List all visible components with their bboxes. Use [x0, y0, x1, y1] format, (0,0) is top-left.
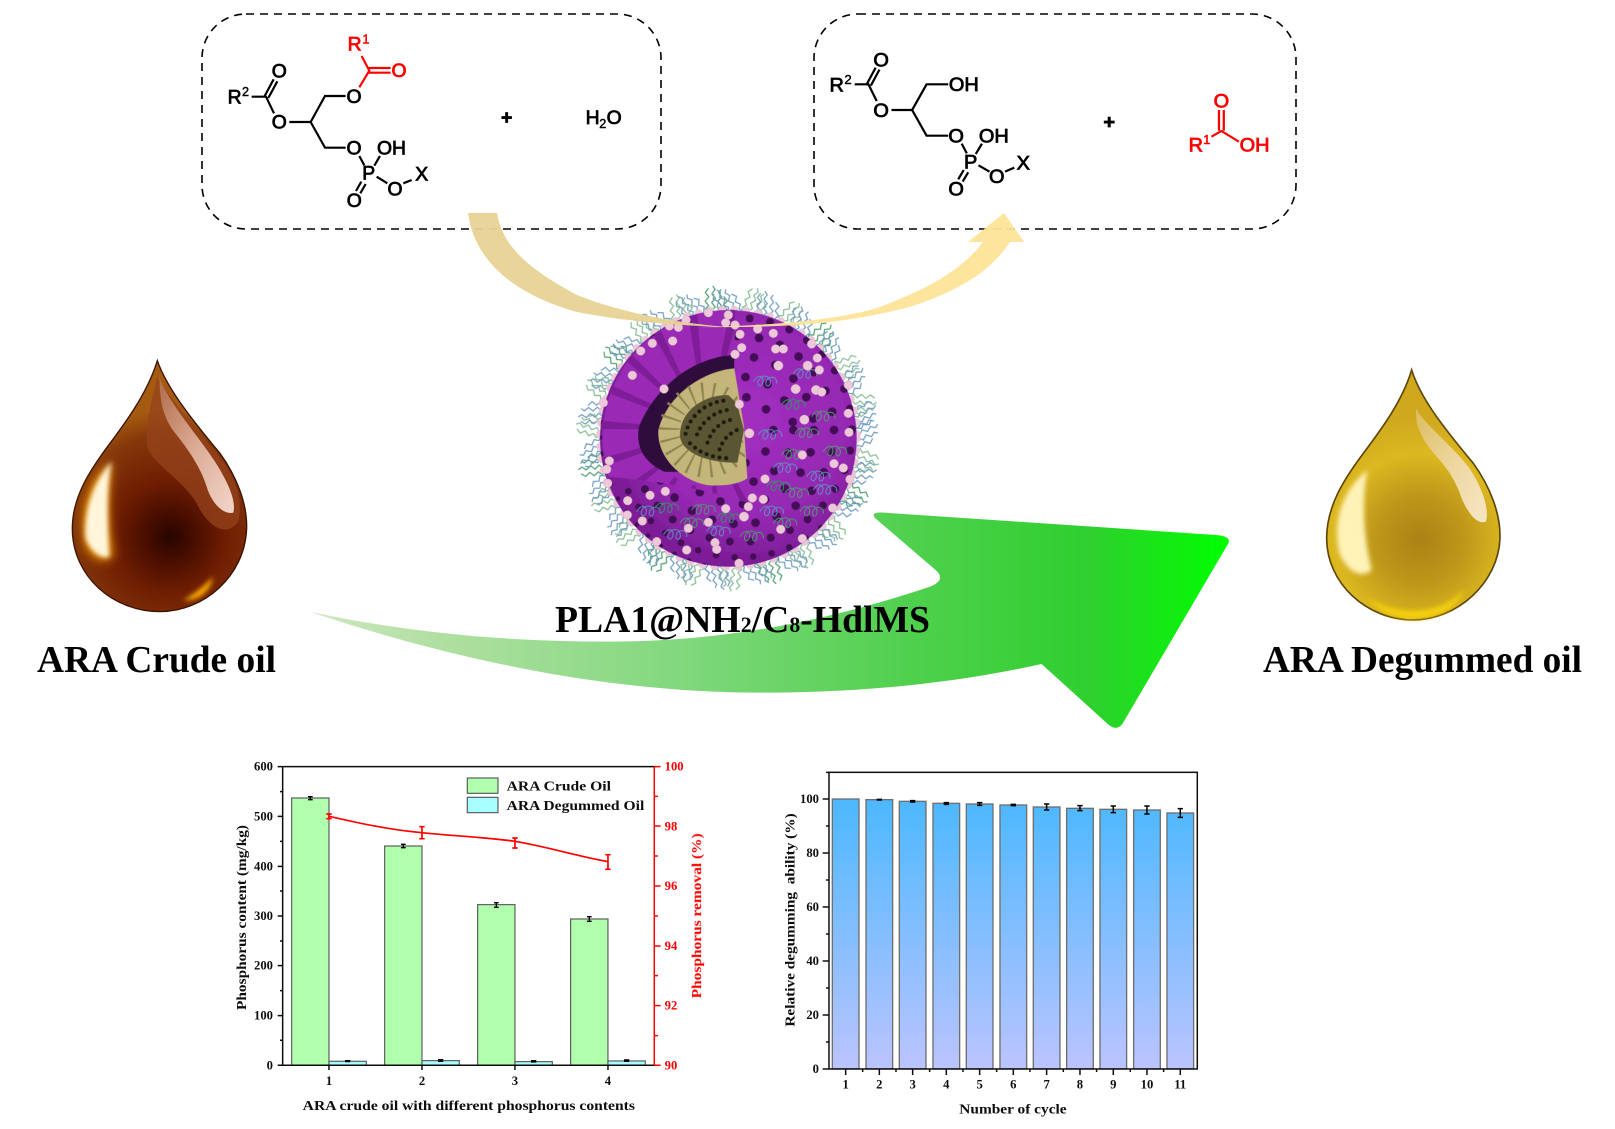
right axis labels: 96 [665, 879, 677, 893]
chemical structure: lysophospholipid and fatty acid: O [873, 100, 889, 122]
label: PLA1@NH2/C8-HdlMS: PLA1@NH2/C8-HdlMS [555, 599, 930, 641]
chemical structure: lysophospholipid and fatty acid: X [1017, 153, 1030, 174]
left axis labels: 100 [254, 1009, 273, 1023]
chemical structure: phospholipid with water: R [228, 87, 242, 108]
chemical structure: lysophospholipid and fatty acid: OH [979, 126, 1009, 147]
label: ARA Degummed oil: ARA Degummed oil [1263, 639, 1582, 681]
chemical structure: phospholipid with water: O [607, 108, 622, 129]
surface ligand curls [637, 368, 847, 541]
y axis labels [800, 792, 819, 1076]
chemical structure: phospholipid with water [228, 32, 622, 212]
chemical structure: phospholipid with water: OH [377, 138, 406, 159]
chemical structure: phospholipid with water: 1 [362, 32, 369, 46]
right axis labels [665, 760, 684, 1072]
icon: crude oil drop [72, 361, 247, 612]
x axis labels: 2 [876, 1078, 882, 1092]
right axis labels: 92 [665, 999, 677, 1013]
bar error bars [308, 797, 629, 1062]
y axis title: Relative degumming ability (%) [783, 813, 798, 1027]
phosphorus removal line [326, 814, 611, 869]
y axis labels: 100 [800, 792, 819, 806]
degummed oil bars [329, 1061, 645, 1065]
y axis labels: 40 [806, 954, 819, 968]
bar chart: phosphorus content and removal [235, 760, 705, 1114]
panel: products dashed box [814, 14, 1296, 229]
left and bottom axes [278, 767, 654, 1070]
icon: degummed oil drop [1327, 370, 1500, 620]
x axis labels: 4 [943, 1078, 950, 1092]
chemical structure: lysophospholipid and fatty acid: O [1214, 91, 1229, 113]
axes frame and ticks [823, 772, 1197, 1075]
chemical structure: phospholipid with water: O [391, 61, 407, 82]
icon: nanoparticle PLA1@NH2/C8-HdlMS [573, 283, 883, 593]
x axis labels: 3 [909, 1078, 916, 1092]
panel: substrates dashed box [202, 14, 661, 229]
y axis title right: Phosphorus removal (%) [690, 833, 705, 998]
x axis labels [842, 1078, 1186, 1092]
x axis labels: 4 [605, 1074, 612, 1088]
purple shell [600, 310, 857, 567]
x axis labels: 2 [419, 1074, 425, 1088]
x axis labels: 7 [1043, 1078, 1050, 1092]
y axis labels: 80 [806, 846, 819, 860]
chemical structure: lysophospholipid and fatty acid: O [989, 166, 1004, 188]
x axis labels: 5 [976, 1078, 983, 1092]
x axis labels [326, 1074, 612, 1088]
right axis [654, 767, 661, 1065]
right axis labels: 90 [665, 1058, 677, 1072]
x axis title: ARA crude oil with different phosphorus contents [303, 1099, 636, 1114]
cycle bars [832, 799, 1194, 1069]
chemical structure: phospholipid with water: H [586, 108, 600, 129]
right axis labels: 100 [665, 760, 684, 774]
chemical structure: lysophospholipid and fatty acid: OH [949, 74, 979, 96]
shell pores [600, 314, 856, 567]
left axis labels: 400 [254, 859, 273, 873]
y axis title left: Phosphorus content (mg/kg) [235, 825, 250, 1010]
arrow: yellow product arrow out of particle [700, 213, 1024, 327]
x axis labels: 10 [1141, 1078, 1153, 1092]
pale particle rim [600, 310, 857, 567]
x axis labels: 6 [1010, 1078, 1016, 1092]
chemical structure: phospholipid with water: O [347, 191, 362, 212]
chemical structure: lysophospholipid and fatty acid: R [1189, 135, 1203, 157]
y axis labels: 0 [813, 1062, 819, 1076]
chemical structure: lysophospholipid and fatty acid: O [873, 50, 889, 71]
ligand chains around the particle [573, 283, 883, 593]
legend: ARA Crude Oil [507, 780, 611, 795]
left axis labels: 200 [254, 959, 273, 973]
chemical structure: phospholipid with water: R [348, 35, 362, 56]
chemical structure: lysophospholipid and fatty acid [830, 50, 1270, 200]
chemical structure: phospholipid with water: + [501, 108, 512, 129]
y axis labels: 60 [806, 900, 819, 914]
crude oil bars [292, 798, 608, 1065]
right axis labels: 94 [665, 939, 678, 953]
chemical structure: lysophospholipid and fatty acid: + [1103, 112, 1115, 133]
chemical structure: lysophospholipid and fatty acid: O [948, 179, 964, 200]
x axis labels: 8 [1077, 1078, 1083, 1092]
chemical structure: lysophospholipid and fatty acid: 2 [844, 72, 852, 87]
chemical structure: lysophospholipid and fatty acid: P [964, 152, 977, 174]
pink surface particles [599, 308, 854, 568]
chemical structure: phospholipid with water: O [346, 139, 362, 160]
x axis labels: 3 [512, 1074, 518, 1088]
chemical structure: lysophospholipid and fatty acid: 1 [1203, 132, 1210, 147]
chemical structure: phospholipid with water: O [272, 113, 287, 134]
right axis labels: 98 [665, 819, 677, 833]
left axis labels [254, 760, 273, 1072]
chemical structure: phospholipid with water: O [346, 87, 362, 108]
chemical structure: phospholipid with water: X [415, 165, 428, 186]
chemical structure: phospholipid with water: O [387, 179, 403, 200]
x axis title: Number of cycle [959, 1102, 1067, 1117]
x axis labels: 11 [1174, 1078, 1186, 1092]
arrow: tan substrate arrow into particle [468, 213, 727, 327]
chemical structure: lysophospholipid and fatty acid: R [830, 75, 844, 97]
x axis labels: 1 [842, 1078, 849, 1092]
error bars [877, 799, 1183, 817]
left axis labels: 300 [254, 909, 273, 923]
x axis labels: 1 [326, 1074, 332, 1088]
left axis labels: 0 [267, 1058, 273, 1072]
chemical structure: phospholipid with water: O [272, 62, 287, 83]
label: ARA Crude oil: ARA Crude oil [37, 639, 276, 681]
y axis labels: 20 [806, 1008, 819, 1022]
chemical structure: lysophospholipid and fatty acid: O [948, 126, 964, 148]
legend [467, 778, 644, 814]
arrow: large green process arrow [309, 513, 1229, 728]
left axis labels: 500 [254, 809, 273, 823]
legend: ARA Degummed Oil [507, 799, 644, 814]
chemical structure: lysophospholipid and fatty acid: OH [1240, 135, 1270, 157]
cutaway section [602, 310, 748, 503]
chemical structure: phospholipid with water: P [362, 164, 375, 185]
bar chart: relative degumming ability over cycles [783, 772, 1197, 1117]
x axis labels: 9 [1110, 1078, 1116, 1092]
chemical structure: phospholipid with water: 2 [599, 117, 606, 131]
left axis labels: 600 [254, 760, 273, 774]
chemical structure: phospholipid with water: 2 [242, 85, 249, 99]
